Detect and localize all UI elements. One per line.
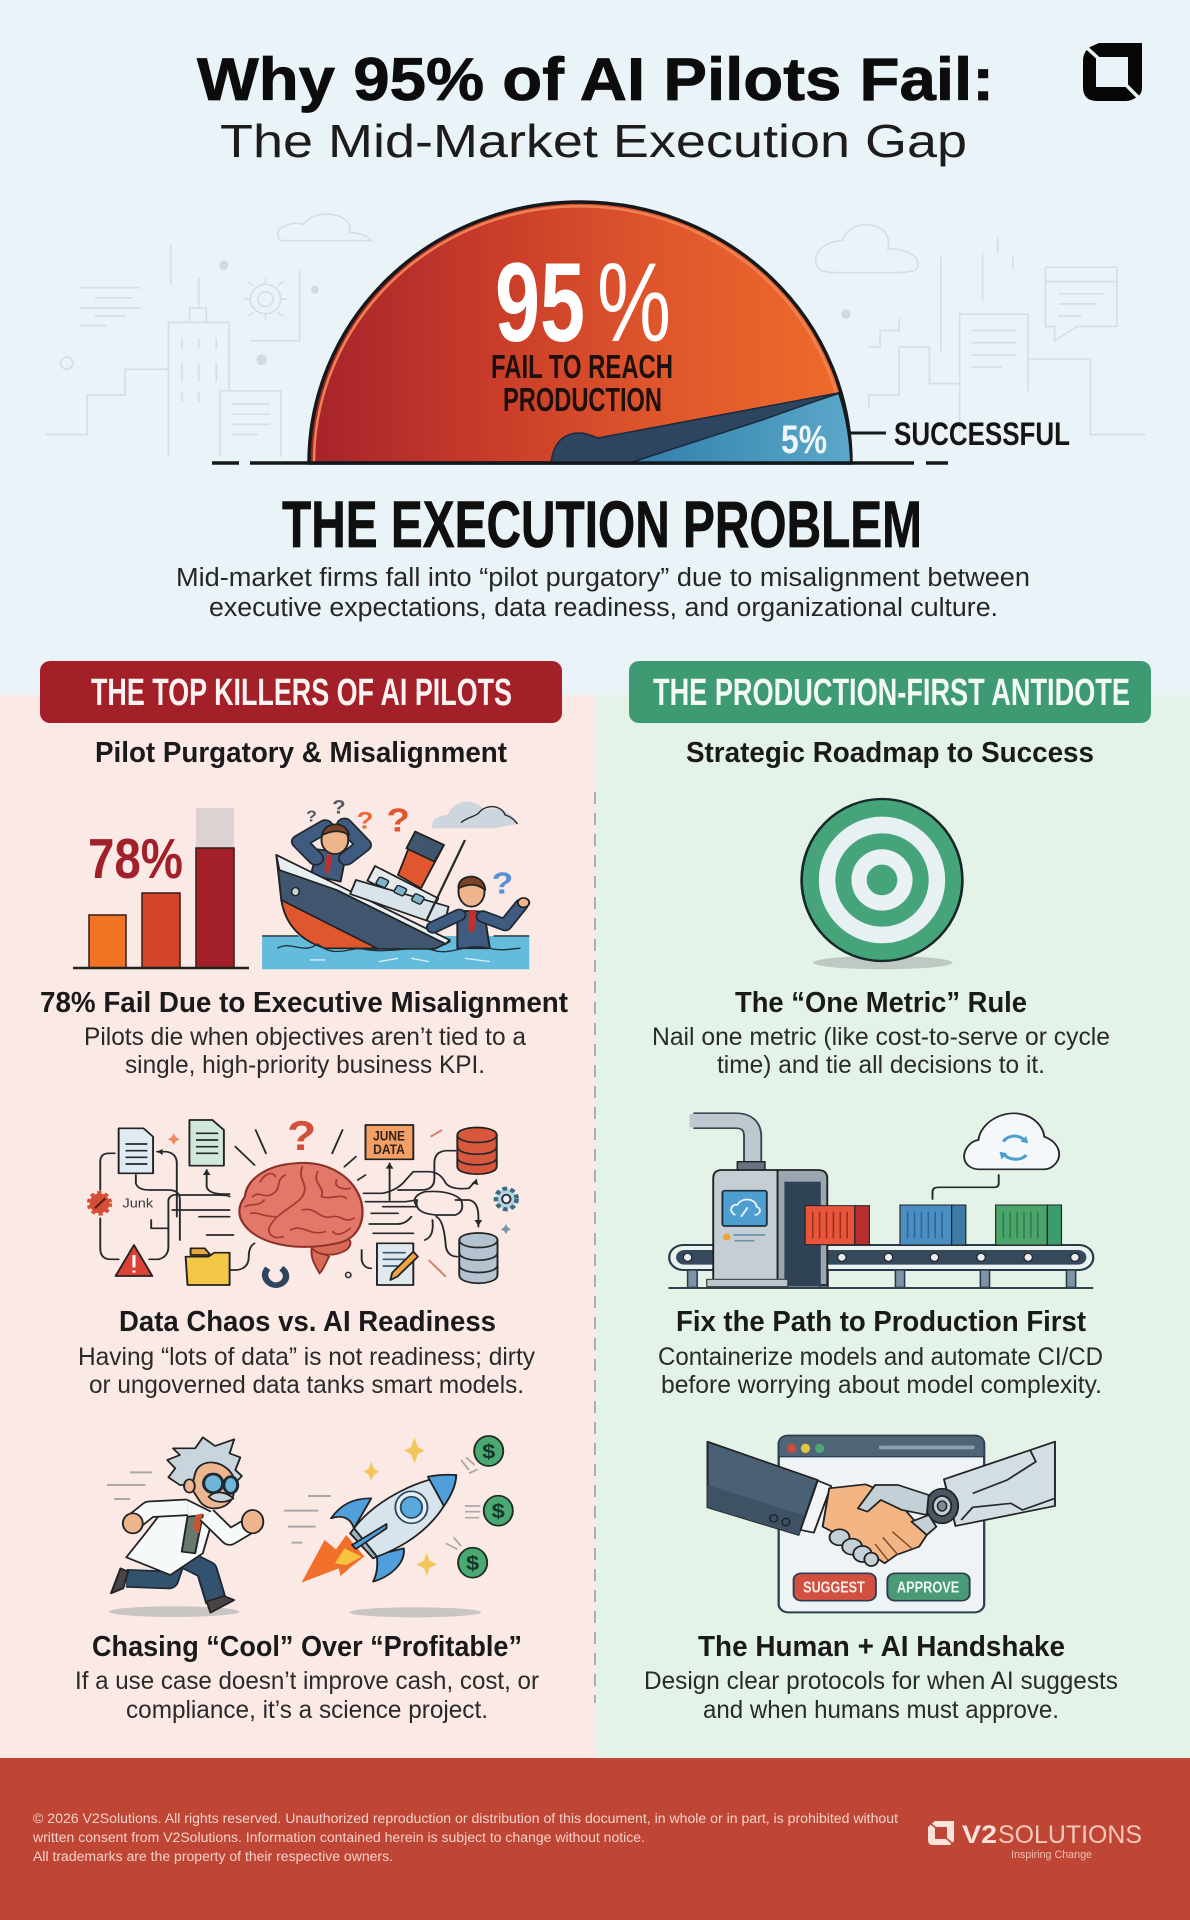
text: chasing cool: If a use case doesn’t improve cash, cost, or <box>75 1667 539 1695</box>
robot arm <box>926 1442 1055 1526</box>
gauge dome <box>309 202 851 463</box>
human hand <box>823 1484 927 1563</box>
blue container <box>900 1205 966 1245</box>
red container <box>805 1206 869 1245</box>
subheading: pilot purgatory: Pilot Purgatory & Misalignment <box>95 737 507 769</box>
green container <box>996 1205 1061 1245</box>
text: one metric rule: Nail one metric (like cost-to-serve or cycle <box>652 1023 1110 1051</box>
text: problem description: executive expectations, data readiness, and organizational culture. <box>209 594 998 622</box>
icon: brain and data chaos <box>90 1112 517 1285</box>
label fail to reach production: FAIL TO REACH <box>491 348 673 385</box>
water <box>262 936 529 969</box>
gauge needle <box>551 393 838 463</box>
glasses <box>204 1474 238 1493</box>
text: data chaos: Data Chaos vs. AI Readiness <box>119 1306 496 1338</box>
text: chasing cool: Chasing “Cool” Over “Profitable” <box>92 1631 522 1663</box>
june data label: DATA <box>373 1142 405 1158</box>
front leg <box>180 1557 216 1602</box>
icon: production conveyor with containers <box>668 1113 1093 1288</box>
face <box>191 1462 233 1508</box>
title <box>197 46 994 167</box>
background line art: city and tech icons <box>46 214 1146 457</box>
pipe <box>690 1121 765 1170</box>
ship hull <box>276 855 450 949</box>
small accents <box>168 1130 511 1278</box>
approve button: APPROVE <box>897 1580 959 1596</box>
flame <box>302 1535 364 1583</box>
folder <box>186 1248 230 1285</box>
waves <box>262 936 529 962</box>
banner: top killers: THE TOP KILLERS OF AI PILOTS <box>91 672 512 714</box>
logo mark <box>928 1821 954 1845</box>
red question mark and rays <box>235 1112 365 1180</box>
approve button <box>887 1573 970 1601</box>
icon: rocket and dollar coins: $ <box>482 1440 496 1463</box>
fins <box>331 1498 371 1528</box>
panel: top killers background <box>0 695 595 1759</box>
text: copyright: written consent from V2Solutions. Information contained herein is subject to change without notice. <box>32 1830 645 1845</box>
label successful: SUCCESSFUL <box>894 416 1070 452</box>
brain <box>239 1163 362 1273</box>
tangled data lines <box>100 1151 478 1270</box>
text: human ai handshake <box>644 1631 1118 1724</box>
label fail to reach production <box>491 348 673 418</box>
heading: the execution problem: THE EXECUTION PROBLEM <box>282 487 922 561</box>
label 5%: 5% <box>781 418 827 462</box>
back leg <box>126 1563 174 1580</box>
footer logo: v2solutions: Inspiring Change <box>1011 1849 1092 1861</box>
banner: antidote <box>629 661 1151 723</box>
gauge rim highlight <box>314 206 838 463</box>
footer logo: v2solutions <box>928 1821 1142 1861</box>
question marks: ? <box>357 808 374 834</box>
machine <box>707 1170 827 1287</box>
gray database <box>459 1233 498 1283</box>
icon: rocket and dollar coins: $ <box>466 1551 480 1575</box>
text: one metric rule: time) and tie all decisions to it. <box>717 1051 1045 1079</box>
red gear and junk label: Junk <box>122 1196 154 1211</box>
icon: human and AI handshake on app window <box>707 1436 1055 1612</box>
text: chasing cool <box>75 1631 539 1724</box>
arms <box>134 1507 188 1522</box>
text: human ai handshake: Design clear protocols for when AI suggests <box>644 1667 1118 1695</box>
green document <box>189 1120 224 1166</box>
banner: top killers <box>40 661 562 723</box>
icon: target <box>802 799 962 969</box>
red database <box>457 1127 497 1174</box>
footer logo: v2solutions: SOLUTIONS <box>998 1821 1142 1849</box>
text: executive misalignment: Pilots die when objectives aren’t tied to a <box>84 1023 526 1051</box>
text: chasing cool: compliance, it’s a science project. <box>126 1696 488 1724</box>
ship cabins <box>367 866 438 913</box>
executive on ship <box>299 824 364 882</box>
icon: running scientist <box>107 1437 263 1617</box>
bar chart: 78% <box>73 808 249 968</box>
panel: footer <box>0 1758 1190 1920</box>
red gear and junk label <box>90 1193 154 1213</box>
text: data chaos: or ungoverned data tanks smart models. <box>89 1371 524 1399</box>
icon: rocket and dollar coins: $ <box>492 1499 506 1523</box>
bar chart: 78%: 78% <box>88 827 183 891</box>
cloud with sync icon <box>933 1113 1059 1199</box>
blue gear <box>496 1189 517 1209</box>
title: Why 95% of AI Pilots Fail: <box>197 46 994 113</box>
text: fix the path: Fix the Path to Production First <box>676 1306 1086 1338</box>
text: one metric rule <box>652 987 1110 1079</box>
text: data chaos: Having “lots of data” is not readiness; dirty <box>78 1343 535 1371</box>
text: problem description <box>176 564 1030 622</box>
question marks: ? <box>492 865 513 900</box>
rocket body <box>354 1475 456 1557</box>
text: human ai handshake: and when humans must approve. <box>703 1696 1059 1724</box>
suit sleeve <box>707 1442 818 1535</box>
text: copyright: © 2026 V2Solutions. All rights reserved. Unauthorized reproduction or distribution of this document, in whole or in part, is prohibited without <box>33 1811 898 1826</box>
refresh icon <box>265 1268 286 1285</box>
text: fix the path: before worrying about model complexity. <box>661 1371 1102 1399</box>
question marks <box>306 797 513 900</box>
text: data chaos <box>78 1306 535 1399</box>
suggest button: SUGGEST <box>803 1580 865 1596</box>
text: fix the path <box>658 1306 1103 1399</box>
sparkles <box>364 1437 437 1576</box>
hair <box>167 1437 242 1485</box>
icon: rocket and dollar coins <box>284 1436 513 1617</box>
text: one metric rule: The “One Metric” Rule <box>735 987 1027 1019</box>
gauge baseline <box>212 461 948 465</box>
conveyor <box>668 1245 1093 1288</box>
motion lines <box>446 1457 480 1549</box>
june data label: JUNE <box>373 1129 405 1144</box>
subheading: strategic roadmap: Strategic Roadmap to Success <box>686 737 1094 769</box>
robot fingers <box>830 1485 936 1566</box>
question marks: ? <box>306 809 317 825</box>
warning triangle <box>116 1245 152 1276</box>
gauge blue 5% wedge <box>629 393 851 463</box>
label fail to reach production: PRODUCTION <box>503 381 662 418</box>
app window <box>779 1436 984 1612</box>
suggest button <box>794 1573 876 1601</box>
text: human ai handshake: The Human + AI Handshake <box>698 1631 1065 1663</box>
lab coat <box>126 1500 214 1575</box>
footer logo: v2solutions: V2 <box>962 1821 997 1849</box>
document <box>119 1128 153 1173</box>
question marks: ? <box>332 797 346 818</box>
coins <box>458 1436 513 1578</box>
label 95%: 95 <box>495 240 585 365</box>
text: copyright: All trademarks are the property of their respective owners. <box>33 1849 393 1864</box>
executive in water <box>427 840 529 948</box>
text: fix the path: Containerize models and automate CI/CD <box>658 1343 1103 1371</box>
document with pencil <box>377 1243 418 1285</box>
decorative dots <box>219 260 851 365</box>
title: The Mid-Market Execution Gap <box>220 115 967 167</box>
text: executive misalignment <box>40 987 568 1079</box>
ship funnel <box>398 832 444 888</box>
text: executive misalignment: 78% Fail Due to Executive Misalignment <box>40 987 568 1019</box>
text: executive misalignment: single, high-priority business KPI. <box>125 1051 485 1079</box>
text: copyright <box>32 1811 898 1864</box>
question marks: ? <box>387 802 410 839</box>
icon: sinking ship with executives <box>262 797 529 969</box>
text: problem description: Mid-market firms fall into “pilot purgatory” due to misalignment between <box>176 564 1030 592</box>
icon: brand logo <box>1083 43 1142 101</box>
cloud <box>432 802 517 828</box>
chart: gauge 95% vs 5% <box>212 202 1070 463</box>
red question mark and rays: ? <box>287 1112 316 1159</box>
june data label <box>365 1125 413 1159</box>
label 95%: % <box>597 240 671 365</box>
panel: antidote background <box>595 695 1190 1759</box>
